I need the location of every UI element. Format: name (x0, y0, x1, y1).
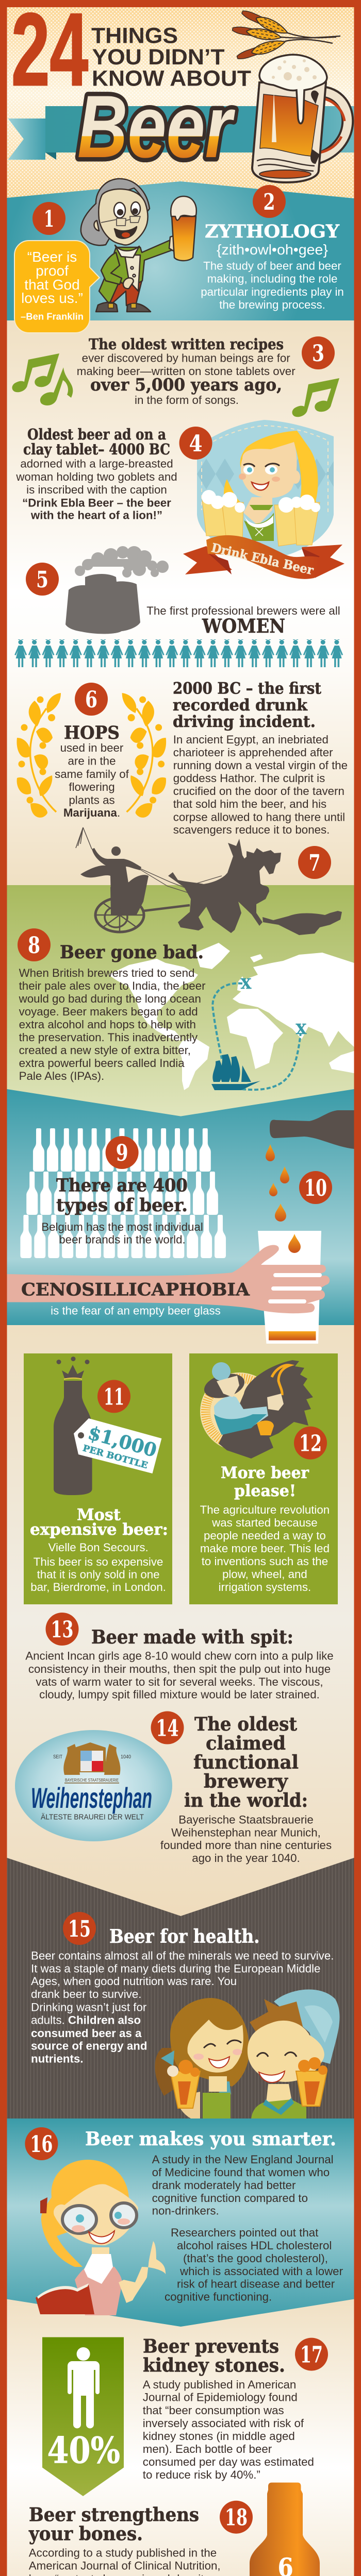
text: ad description: is inscribed with the caption (26, 483, 167, 496)
section background: teal facts 9-10 (7, 1089, 354, 1325)
text: kidney stone study: kidney stones (in middle aged (143, 2430, 295, 2443)
text: IPA story: would go bad during the long ocean (19, 992, 201, 1005)
fact 7: first drunk driving (76, 679, 348, 935)
text: agriculture revolution: The agriculture revolution (200, 1503, 330, 1516)
badge 3 (302, 336, 335, 369)
ribbon banner (8, 106, 354, 160)
heading: beer prevents kidney stones: Beer prevents (143, 2336, 279, 2358)
speech bubble: Ben Franklin quote: that God (24, 277, 80, 293)
badge 9: 9 (116, 1140, 128, 1166)
text: minerals: nutrients. (31, 2053, 84, 2065)
logo: Weihenstephan oval: SEIT (53, 1754, 62, 1760)
heading: beer made with spit: Beer made with spit: (91, 1626, 293, 1648)
text: drunk driving body: goddess Hathor. The culprit is (173, 772, 325, 785)
heading: oldest functional brewery: in the world: (184, 1790, 308, 1811)
badge 6 (75, 683, 108, 716)
speech bubble: Ben Franklin quote: “Beer is (27, 249, 77, 265)
speech bubble: Ben Franklin quote: proof (36, 263, 69, 279)
badge 7: 7 (308, 850, 321, 876)
text: agriculture revolution: people needed a way to (204, 1529, 326, 1542)
text: HDL cholesterol: Researchers pointed out that (171, 2226, 319, 2239)
charioteer (80, 846, 141, 896)
section background: teal fact 16 (7, 2119, 354, 2327)
heading: drunk driving: driving incident. (173, 713, 316, 731)
illustration: chariot and horse silhouette (76, 827, 342, 935)
text: drunk driving body: crucified on the door of the tavern (173, 785, 344, 798)
pictogram: 40 percent arrow with person: 40% (47, 2429, 120, 2472)
badge 12 (294, 1427, 327, 1460)
badge 12: 12 (299, 1431, 322, 1457)
icon: music note right (292, 378, 339, 417)
text: HDL cholesterol: risk of heart disease and better (177, 2277, 335, 2290)
text: minerals: consumed beer as a (31, 2027, 142, 2040)
heading: drunk driving: recorded drunk (173, 696, 308, 715)
fact 17: kidney stones (42, 2336, 328, 2496)
price tag: $1,000 (86, 1422, 159, 1462)
heading: 400 types: There are 400 (56, 1175, 188, 1196)
badge 8: 8 (28, 933, 40, 959)
text: IPA story: the preservation. This inadvertently (19, 1031, 198, 1044)
illustration: farmer with wheat sheaf (200, 1360, 313, 1459)
text: Vielle Bon Secours: bar, Bierdrome, in London. (30, 1581, 166, 1594)
badge 11 (97, 1380, 130, 1413)
text: New England Journal study: A study in the New England Journal (152, 2153, 334, 2166)
text: Belgium: beer brands in the world. (59, 1233, 186, 1246)
icon: smoke cloud (75, 546, 169, 578)
logo: Weihenstephan oval: 1040 (121, 1754, 131, 1760)
text: minerals: adults. Children also (31, 2013, 141, 2027)
text: minerals: Drinking wasn’t just for (31, 2001, 147, 2014)
fact 13: beer made with spit (25, 1613, 334, 1701)
badge 6: 6 (85, 687, 97, 713)
badge 13 (45, 1613, 78, 1646)
icon: music note left (12, 353, 59, 392)
text: HDL cholesterol: (that’s the good cholesterol), (183, 2252, 328, 2265)
text: HDL cholesterol: alcohol raises HDL cholesterol (177, 2239, 332, 2252)
text: IPA story: their pale ales over to India, the beer (19, 979, 206, 992)
badge 10: 10 (304, 1175, 327, 1201)
definition text: The study of beer and beer (203, 259, 341, 272)
badge 10 (299, 1171, 332, 1204)
badge 14: 14 (156, 1716, 178, 1741)
logo: Weihenstephan oval: BAYERISCHE STAATSBRAUERIE (65, 1778, 119, 1783)
text: hops body: are in the (68, 755, 116, 768)
heading: most expensive beer: Most (77, 1505, 121, 1524)
illustration: boy with beer (248, 1989, 340, 2119)
text: agriculture revolution: make more beer. This led (200, 1542, 330, 1555)
icon: pouring bottle (270, 1110, 354, 1149)
section background: dotted header (7, 7, 354, 203)
heading: 400 types (56, 1175, 188, 1216)
text: first professional brewers: The first professional brewers were all (146, 604, 340, 617)
section background: teal facts 1-2 (7, 181, 354, 320)
badge 4: 4 (189, 431, 202, 457)
badge 11: 11 (104, 1384, 124, 1410)
heading: 400 types: types of beer. (56, 1195, 188, 1216)
icon: mug silhouette (65, 574, 140, 634)
pronunciation: {zith•owl•oh•gee} (217, 242, 328, 258)
icon: orange bottle 6 mgs per liter (250, 2483, 320, 2576)
crest (63, 1742, 120, 1775)
fact 2: Zythology (201, 185, 344, 311)
text: minerals: drank beer to survive. (31, 1988, 141, 2001)
definition text: particular ingredients play in (201, 285, 344, 298)
badge 1: 1 (44, 206, 54, 232)
heading: beer strengthens your bones: your bones. (28, 2523, 143, 2545)
heading: most expensive beer (30, 1505, 168, 1539)
fact 10: cenosillicaphobia (7, 1110, 354, 1344)
text: silicon: American Journal of Clinical Nutrition, (29, 2559, 221, 2572)
icon: empty beer glass (258, 1231, 321, 1344)
badge 8 (18, 928, 51, 961)
badge 14 (151, 1711, 184, 1744)
speech bubble: Ben Franklin quote: –Ben Franklin (21, 311, 84, 321)
text: agriculture revolution: irrigation systems. (219, 1581, 311, 1594)
title word: Beer: Beer (77, 77, 235, 176)
text: IPA story: extra alcohol and hops to help with (19, 1018, 196, 1031)
logo: Weihenstephan oval: ÄLTESTE BRAUREI DER WELT (41, 1813, 144, 1822)
text: hops body: plants as (69, 793, 115, 807)
badge 2 (253, 185, 286, 218)
section background: dark striped fact 15 (7, 1858, 354, 2119)
text: minerals: source of energy and (31, 2040, 147, 2053)
section background: cream facts 11-14 (7, 1325, 354, 1918)
badge 4 (179, 427, 212, 460)
text: Vielle Bon Secours: This beer is so expensive (34, 1555, 163, 1568)
text: agriculture revolution: was started because (211, 1516, 318, 1529)
horse (168, 839, 281, 933)
heading: oldest functional brewery (184, 1714, 308, 1811)
icon: right hop wreath (122, 693, 166, 818)
section background: green fact 8 (7, 885, 354, 1116)
text: ad description: “Drink Ebla Beer – the beer (22, 497, 171, 509)
icon: route X marks (241, 976, 307, 1038)
text: kidney stone study: to reduce risk by 40%.” (143, 2468, 260, 2481)
text: IPA story: created a new style of extra bitter, (19, 1044, 191, 1057)
heading: oldest written recipes: The oldest written recipes (89, 335, 284, 353)
text: Vielle Bon Secours: Vielle Bon Secours. (48, 1541, 149, 1554)
text: Weihenstephan history: founded more than nine centuries (160, 1839, 332, 1852)
heading: WOMEN: WOMEN (202, 615, 285, 637)
text: drunk driving body: charioteer is apprehended after (173, 746, 333, 759)
text: kidney stone study: A study published in American (143, 2378, 296, 2391)
fact 14: oldest brewery (15, 1711, 332, 1865)
panel: fact 12 more beer please (189, 1353, 338, 1604)
heading: beer prevents kidney stones (143, 2336, 285, 2376)
heading: Cenosillicaphobia: CENOSILLICAPHOBIA (21, 1280, 250, 1300)
text: hops body: same family of (55, 768, 129, 781)
text: silicon: According to a study published in the (29, 2546, 217, 2560)
heading: beer strengthens your bones: Beer strengthens (29, 2504, 199, 2526)
text: drunk driving body: In ancient Egypt, an inebriated (173, 733, 329, 746)
badge 7 (298, 846, 331, 879)
text: recipes body: ever discovered by human beings are for (82, 352, 290, 365)
heading: most expensive beer: expensive beer: (30, 1520, 168, 1539)
title text (91, 24, 251, 91)
title (11, 0, 251, 107)
text: Vielle Bon Secours: that it is only sold in one (37, 1568, 160, 1581)
heading: more beer please: More beer (221, 1464, 309, 1482)
text: agriculture revolution: plow, wheel, and (222, 1568, 307, 1581)
text: New England Journal study: non-drinkers. (152, 2204, 219, 2217)
badge 16: 16 (30, 2131, 53, 2158)
icon: arm holding the glass (7, 1245, 330, 1313)
text: kidney stone study: Journal of Epidemiology found (143, 2391, 298, 2404)
icon: single music note (40, 367, 73, 405)
heading: drunk driving: 2000 BC – the first (173, 679, 322, 698)
icon: crowned bottle (54, 1357, 92, 1495)
price tag (74, 1418, 161, 1473)
chariot (95, 869, 222, 932)
heading: Zythology: ZYTHOLOGY (205, 221, 340, 242)
text: minerals: Beer contains almost all of the minerals we need to survive. (31, 1950, 334, 1962)
text: Incan girls: vats of warm water to sit for several weeks. The viscous, (36, 1675, 323, 1688)
title text: YOU DIDN’T (92, 45, 225, 70)
fact 15: beer for health (31, 1912, 340, 2119)
text: agriculture revolution: to inventions such as the (202, 1555, 328, 1568)
heading: beer makes you smarter: Beer makes you smarter. (85, 2128, 336, 2150)
badge 15: 15 (68, 1916, 91, 1942)
icon: left hop wreath (17, 693, 61, 818)
ribbon: Drink Ebla Beer: Drink Ebla Beer (210, 540, 315, 578)
text: drunk driving body: corpse allowed to hang there until (173, 811, 345, 823)
text: ad description: woman holding two goblets and (15, 470, 177, 483)
text: Weihenstephan history: Weihenstephan near Munich, (171, 1826, 321, 1839)
text: minerals: Ages, when good nutrition was rare. You (31, 1975, 237, 1988)
text: Incan girls: consistency in their mouths, then spit the pulp out into huge (28, 1663, 331, 1675)
heading: oldest functional brewery: functional (193, 1752, 299, 1773)
ribbon: Drink Ebla Beer (183, 535, 344, 579)
badge 1 (32, 202, 65, 235)
badge 13: 13 (51, 1617, 73, 1643)
title text: KNOW ABOUT (92, 66, 251, 91)
badge 18 (220, 2501, 253, 2534)
map land masses (108, 943, 354, 1090)
text: in the form of songs: in the form of songs. (135, 394, 239, 406)
text: IPA story: extra powerful beers called India (19, 1057, 185, 1070)
badge 17: 17 (300, 2342, 323, 2368)
text: ad description: adorned with a large-breasted (20, 457, 173, 470)
definition text: making, including the role (207, 273, 337, 285)
badge 5: 5 (36, 567, 48, 593)
text: IPA story: voyage. Beer makers began to add (19, 1005, 198, 1018)
logo: Weihenstephan oval: Weihenstephan (31, 1782, 152, 1814)
icon: sailing ship (211, 1054, 260, 1090)
icon: route X marks: X (296, 1022, 307, 1038)
text: hops body: used in beer (60, 741, 124, 754)
heading: more beer please (221, 1464, 309, 1500)
fact 4: oldest beer ad (15, 420, 344, 579)
price tag: PER BOTTLE (81, 1443, 149, 1471)
text: Weihenstephan history: ago in the year 1040. (192, 1852, 300, 1865)
heading: drunk driving (173, 679, 322, 731)
icon: route X marks: X (241, 976, 252, 992)
logo: Weihenstephan oval (15, 1730, 172, 1841)
fact 16: beer makes you smarter (25, 2127, 343, 2315)
illustration: woman with glasses and book (36, 2160, 166, 2315)
heading: beer prevents kidney stones: kidney stones. (143, 2354, 285, 2376)
text: kidney stone study: men). Each bottle of beer (143, 2443, 272, 2455)
icon: wheat (232, 7, 340, 62)
text: HDL cholesterol: cognitive functioning. (165, 2291, 272, 2303)
callout: 5,000 years ago: over 5,000 years ago, (90, 375, 282, 395)
text: ad description: with the heart of a lion!” (30, 509, 162, 522)
illustration: Ebla beer maid badge (183, 420, 344, 579)
text: Incan girls: Ancient Incan girls age 8-10 would chew corn into a pulp like (25, 1650, 334, 1663)
pictogram: rows of bottles (19, 1128, 227, 1258)
heading: oldest functional brewery: The oldest (194, 1714, 297, 1735)
text: New England Journal study: of Medicine found that women who (152, 2166, 330, 2179)
heading: beer strengthens your bones (28, 2504, 199, 2545)
text: New England Journal study: drank moderately had better (152, 2179, 296, 2192)
fallen figure (262, 911, 342, 935)
text: Incan girls: cloudy, lumpy spit filled mixture would be later strained. (39, 1688, 320, 1701)
badge 2: 2 (263, 189, 275, 215)
map: world map with route (108, 943, 354, 1090)
section background: cream facts 3-7 (7, 320, 354, 885)
text: IPA story: When British brewers tried to send (19, 967, 194, 979)
heading: oldest beer ad: Oldest beer ad on a (27, 426, 166, 443)
text: Weihenstephan history: Bayerische Staatsbrauerie (178, 1814, 314, 1826)
fact 6: hops (17, 683, 166, 819)
section background: cream facts 17-18 (7, 2299, 354, 2576)
text: recipes body: making beer—written on stone tablets over (77, 365, 296, 378)
fact 8: beer gone bad (18, 928, 206, 1082)
fact 3: oldest recipes (12, 335, 339, 417)
text: fear of an empty glass: is the fear of an empty beer glass (51, 1304, 221, 1317)
text: drunk driving body: that sold him the beer, and his (173, 798, 326, 810)
text: Belgium: Belgium has the most individual (41, 1221, 203, 1233)
heading: HOPS: HOPS (64, 722, 120, 743)
pictogram row: 24 women (13, 639, 343, 667)
heading: oldest beer ad (23, 426, 170, 458)
badge 17 (295, 2338, 328, 2371)
badge 9 (106, 1136, 139, 1169)
text: IPA story: Pale Ales (IPAs). (19, 1070, 104, 1082)
text: kidney stone study: consumed per day was estimated (143, 2455, 314, 2468)
heading: beer for health: Beer for health. (109, 1926, 260, 1947)
route dashes (212, 984, 301, 1090)
icon: beer mug (252, 55, 348, 182)
definition text: the brewing process. (219, 298, 325, 311)
badge 18: 18 (225, 2505, 248, 2531)
badge 16 (25, 2127, 58, 2160)
title text: THINGS (91, 24, 178, 48)
illustration: girl with beer (155, 1998, 250, 2119)
text: minerals: It was a staple of many diets during the European Middle (31, 1962, 320, 1975)
badge 3: 3 (312, 341, 324, 367)
badge 5 (26, 563, 59, 596)
text: kidney stone study: inversely associated with risk of (143, 2417, 304, 2430)
text: hops body: flowering (69, 781, 115, 793)
illustration: Ben Franklin holding a beer (81, 179, 196, 312)
pictogram: 40 percent arrow with person (42, 2337, 124, 2496)
text: kidney stone study: that “beer consumption was (143, 2404, 284, 2417)
fact 5: first brewers were women (13, 546, 343, 667)
heading: more beer please: please! (234, 1482, 296, 1500)
text: New England Journal study: cognitive function compared to (152, 2192, 308, 2205)
heading: oldest beer ad: clay tablet– 4000 BC (23, 440, 170, 458)
text: drunk driving body: running down a vestal virgin of the (173, 759, 348, 772)
speech bubble: Ben Franklin quote (14, 241, 100, 333)
text: HDL cholesterol: which is associated with a lower (179, 2265, 343, 2278)
drop inside the glass (288, 1234, 301, 1253)
text: drunk driving body: scavengers reduce it to bones. (173, 823, 330, 836)
fact 9: 400 types of beer (19, 1128, 227, 1258)
heading: oldest functional brewery: brewery (204, 1771, 288, 1792)
fact 1 (14, 202, 100, 333)
text: hops body: Marijuana. (63, 806, 120, 819)
speech bubble: Ben Franklin quote: loves us.” (21, 290, 83, 306)
whip (76, 827, 92, 849)
icon: beer drops (266, 1144, 289, 1222)
badge 15 (63, 1912, 96, 1945)
heading: Beer gone bad: Beer gone bad. (60, 942, 204, 963)
panel: fact 11 most expensive beer (24, 1353, 172, 1604)
fact 18: beer strengthens bones (28, 2483, 320, 2576)
heading: oldest functional brewery: claimed (206, 1733, 286, 1754)
